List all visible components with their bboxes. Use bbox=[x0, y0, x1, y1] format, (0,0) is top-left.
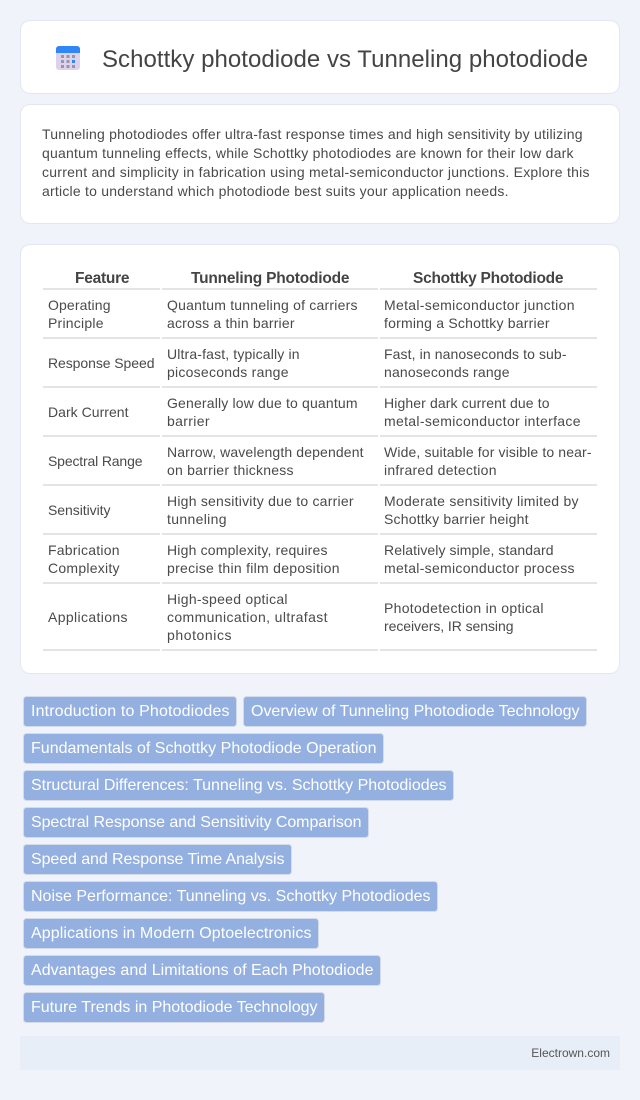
tag bbox=[24, 770, 454, 800]
row: sensitivity: Sensitivity bbox=[48, 502, 110, 518]
header card bbox=[20, 20, 620, 94]
row: applications: communication, ultrafast bbox=[167, 609, 328, 625]
intro text: current and simplicity in fabrication using metal-semiconductor junctions. Explore this bbox=[42, 164, 590, 180]
row: response speed: Response Speed bbox=[48, 355, 154, 371]
intro card bbox=[20, 104, 620, 224]
row: response speed: Ultra-fast, typically in bbox=[167, 346, 300, 362]
row: spectral range: Narrow, wavelength dependent bbox=[167, 444, 364, 460]
row: sensitivity bbox=[48, 493, 578, 527]
comparison table bbox=[43, 270, 597, 651]
row: dark current: Dark Current bbox=[48, 404, 129, 420]
icon: calendar grid bbox=[56, 46, 80, 70]
tag bbox=[24, 734, 384, 764]
tag bbox=[244, 696, 586, 726]
tag: Structural Differences: Tunneling vs. Schottky Photodiodes bbox=[31, 777, 446, 794]
row: dark current: Higher dark current due to bbox=[384, 395, 550, 411]
tag: Overview of Tunneling Photodiode Technology bbox=[251, 703, 580, 720]
tag: Introduction to Photodiodes bbox=[31, 703, 230, 720]
tag: Advantages and Limitations of Each Photodiode bbox=[31, 962, 374, 979]
row: applications: Applications bbox=[48, 609, 128, 625]
row: operating principle: Operating bbox=[48, 297, 110, 313]
row: applications: Photodetection in optical bbox=[384, 600, 544, 616]
table header: Feature bbox=[75, 270, 130, 287]
row: spectral range: infrared detection bbox=[384, 462, 496, 478]
row: applications: receivers, IR sensing bbox=[384, 618, 514, 634]
row: fabrication complexity bbox=[48, 542, 574, 576]
table header bbox=[75, 270, 564, 287]
row: dark current: Generally low due to quantum bbox=[167, 395, 358, 411]
row: operating principle: Metal-semiconductor junction bbox=[384, 297, 574, 313]
intro text: quantum tunneling effects, while Schottky photodiodes are known for their low dark bbox=[42, 145, 574, 161]
row: response speed: Fast, in nanoseconds to sub- bbox=[384, 346, 567, 362]
row: spectral range: Wide, suitable for visible to near- bbox=[384, 444, 592, 460]
table card bbox=[20, 244, 620, 674]
tag: Future Trends in Photodiode Technology bbox=[31, 999, 318, 1016]
tag: Speed and Response Time Analysis bbox=[31, 851, 284, 868]
tag bbox=[24, 696, 236, 726]
tag: Spectral Response and Sensitivity Comparison bbox=[31, 814, 362, 831]
row: sensitivity: High sensitivity due to carrier bbox=[167, 493, 354, 509]
row: fabrication complexity: precise thin film deposition bbox=[167, 560, 340, 576]
intro text bbox=[42, 126, 590, 199]
tag bbox=[24, 882, 438, 912]
topic tags bbox=[24, 696, 586, 1022]
tag bbox=[24, 918, 318, 948]
row: operating principle: forming a Schottky barrier bbox=[384, 315, 550, 331]
tag: Applications in Modern Optoelectronics bbox=[31, 925, 312, 942]
table header: Tunneling Photodiode bbox=[191, 270, 350, 287]
row: response speed: picoseconds range bbox=[167, 364, 289, 380]
row: response speed: nanoseconds range bbox=[384, 364, 510, 380]
row: dark current: metal-semiconductor interface bbox=[384, 413, 581, 429]
tag: Noise Performance: Tunneling vs. Schottky Photodiodes bbox=[31, 888, 430, 905]
row: dark current: barrier bbox=[167, 413, 210, 429]
row: operating principle: Quantum tunneling of carriers bbox=[167, 297, 358, 313]
tag bbox=[24, 844, 292, 874]
row: sensitivity: Moderate sensitivity limited by bbox=[384, 493, 578, 509]
intro text: article to understand which photodiode best suits your application needs. bbox=[42, 183, 508, 199]
tag bbox=[24, 956, 380, 986]
row: fabrication complexity: Complexity bbox=[48, 560, 120, 576]
row: operating principle: across a thin barrier bbox=[167, 315, 295, 331]
row: applications: High-speed optical bbox=[167, 591, 288, 607]
row: sensitivity: tunneling bbox=[167, 511, 226, 527]
row: fabrication complexity: High complexity, requires bbox=[167, 542, 328, 558]
row: spectral range: Spectral Range bbox=[48, 453, 143, 469]
footer source: Electrown.com bbox=[531, 1046, 610, 1060]
row: applications bbox=[48, 591, 544, 643]
tag bbox=[24, 808, 368, 838]
row: applications: photonics bbox=[167, 627, 232, 643]
footer bbox=[20, 1036, 620, 1070]
row: operating principle bbox=[48, 297, 574, 331]
row: fabrication complexity: Fabrication bbox=[48, 542, 120, 558]
tag bbox=[24, 992, 324, 1022]
row: operating principle: Principle bbox=[48, 315, 104, 331]
tag: Fundamentals of Schottky Photodiode Operation bbox=[31, 740, 376, 757]
row: spectral range bbox=[48, 444, 592, 478]
row: fabrication complexity: metal-semiconductor process bbox=[384, 560, 574, 576]
row: fabrication complexity: Relatively simple, standard bbox=[384, 542, 554, 558]
row: response speed bbox=[48, 346, 567, 380]
row: dark current bbox=[48, 395, 581, 429]
title: Schottky photodiode vs Tunneling photodiode bbox=[102, 46, 588, 73]
row: sensitivity: Schottky barrier height bbox=[384, 511, 529, 527]
intro text: Tunneling photodiodes offer ultra-fast response times and high sensitivity by utilizing bbox=[42, 126, 582, 142]
row: spectral range: on barrier thickness bbox=[167, 462, 294, 478]
table header: Schottky Photodiode bbox=[413, 270, 564, 287]
